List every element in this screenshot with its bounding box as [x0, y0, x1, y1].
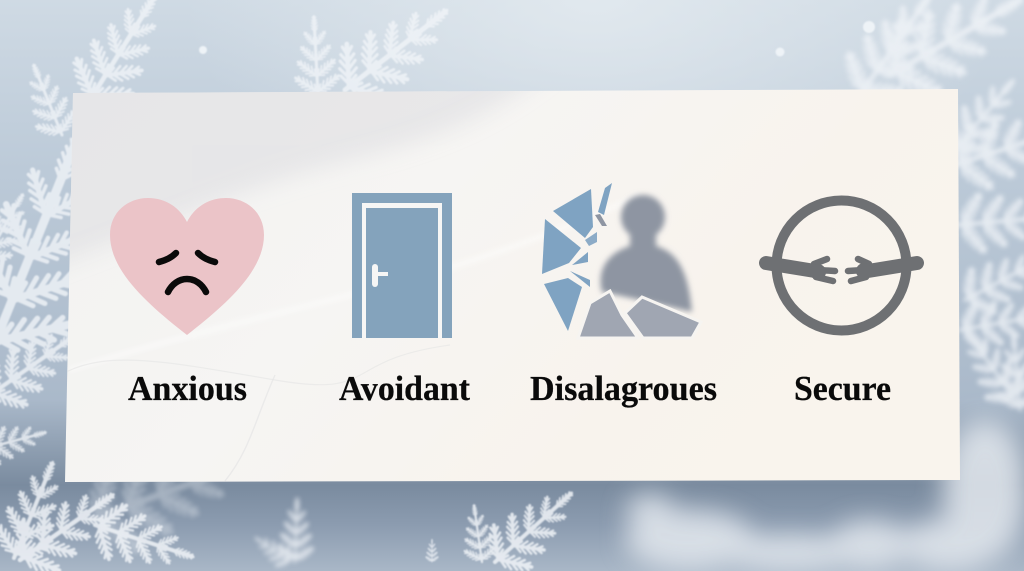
label: Avoidant: Avoidant — [339, 369, 470, 408]
icon: closed door (Avoidant) — [352, 193, 452, 338]
label: Anxious: Anxious — [128, 369, 247, 408]
icon: embracing arms in circle (Secure) — [766, 200, 917, 330]
frost ferns: left and top — [0, 0, 472, 471]
label: Disalagroues: Disalagroues — [530, 369, 717, 408]
broken rubble — [578, 291, 701, 338]
frost haze: bottom right — [625, 420, 1024, 571]
small grey shard — [595, 214, 607, 226]
icon: shattered figure (Disorganized) — [542, 183, 701, 338]
blurred person silhouette — [601, 195, 692, 312]
frost ferns: blurred bottom and right — [248, 0, 1024, 571]
snow specks — [199, 21, 875, 56]
panel: paper card — [40, 60, 960, 482]
frost ferns: bottom — [0, 450, 593, 571]
frost ferns: shadowed under paper — [70, 414, 265, 570]
glass shards — [542, 183, 612, 331]
icon: sad heart (Anxious) — [110, 198, 264, 335]
label: Secure: Secure — [794, 369, 891, 408]
